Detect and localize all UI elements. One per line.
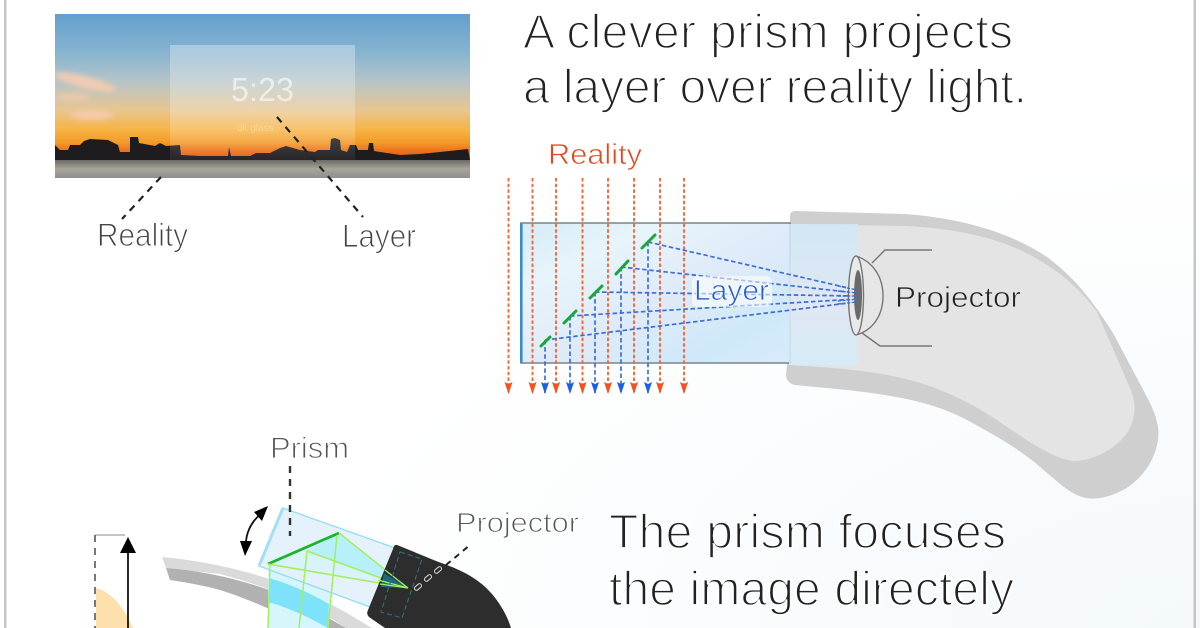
- projector outer shell: [786, 211, 1159, 499]
- pink clouds: [52, 68, 118, 120]
- label: Reality: Reality: [97, 217, 188, 253]
- callout: layer dashed leader: [277, 117, 363, 217]
- clock readout: 5:23: [231, 71, 294, 108]
- label: Layer rays: Layer: [694, 275, 769, 307]
- label backing: Layer: [692, 276, 772, 307]
- city skyline: [55, 137, 470, 160]
- panel: dark projector housing: [367, 545, 511, 628]
- label: Prism: Prism: [270, 432, 349, 465]
- teal beam inside housing: [381, 573, 408, 588]
- eye outline: [95, 534, 125, 536]
- layer rays: [545, 242, 857, 393]
- panel: sunset photo with overlay layer: [52, 14, 470, 178]
- green mirror: [268, 533, 339, 564]
- heading: prism focuses the image: the image directely: [609, 563, 1014, 616]
- panel: prism top view: [240, 466, 408, 628]
- label: Projector small: Projector: [456, 507, 579, 538]
- green rays inside housing: [378, 570, 408, 588]
- label: Layer: Layer: [342, 218, 416, 254]
- light rays: [268, 533, 408, 628]
- projector inner face: [790, 224, 1134, 461]
- icon: projector lens: [838, 250, 932, 346]
- reality rays: [508, 178, 684, 393]
- panel: projector body side view: [786, 211, 1159, 499]
- heading: prism projects a layer: a layer over reality light.: [523, 61, 1027, 114]
- panel: glass prism with reflectors: [508, 178, 858, 393]
- eye dashed marker: [94, 535, 96, 628]
- ok glass prompt: ok glass: [237, 123, 274, 134]
- layer rays converging on the lens: [838, 286, 857, 304]
- prism glass: [521, 223, 790, 363]
- callout: prism leader: [289, 466, 291, 536]
- sight arrow: [120, 537, 136, 628]
- label: Reality rays: Reality: [548, 139, 643, 171]
- white pill markers: [414, 566, 442, 591]
- icon: tilt double arrow: [240, 506, 268, 556]
- water: [55, 160, 470, 178]
- lens light outer band: [162, 557, 372, 628]
- beam over the lens band: [268, 578, 329, 628]
- heading: prism focuses the image: [609, 506, 1014, 616]
- callout: reality dashed leader: [122, 177, 161, 219]
- heading: prism projects a layer: A clever prism projects: [523, 6, 1013, 59]
- pale cone: [266, 551, 408, 588]
- cyan light cone: [307, 533, 408, 588]
- lens dark inner band: [166, 568, 346, 628]
- prism blue end edge: [520, 223, 523, 363]
- prism overlap on projector: [789, 224, 858, 365]
- callout: projector leader: [446, 545, 470, 565]
- heading: prism focuses the image: The prism focuses: [609, 506, 1006, 559]
- panel: eye side diagram: [95, 535, 136, 628]
- frame left border: [4, 0, 6, 628]
- eye shape: [96, 588, 133, 628]
- prism body: [259, 508, 395, 607]
- label: Projector: Projector: [895, 282, 1021, 314]
- heading: prism projects a layer: [523, 6, 1027, 114]
- dashed internal outline: [381, 552, 422, 618]
- panel: lens curve: [162, 557, 372, 628]
- frame right border: [1194, 0, 1196, 628]
- green reflectors: [541, 235, 655, 346]
- prism thick end: [259, 508, 283, 566]
- translucent display layer: [170, 45, 355, 160]
- light beam through the lens: [268, 533, 339, 628]
